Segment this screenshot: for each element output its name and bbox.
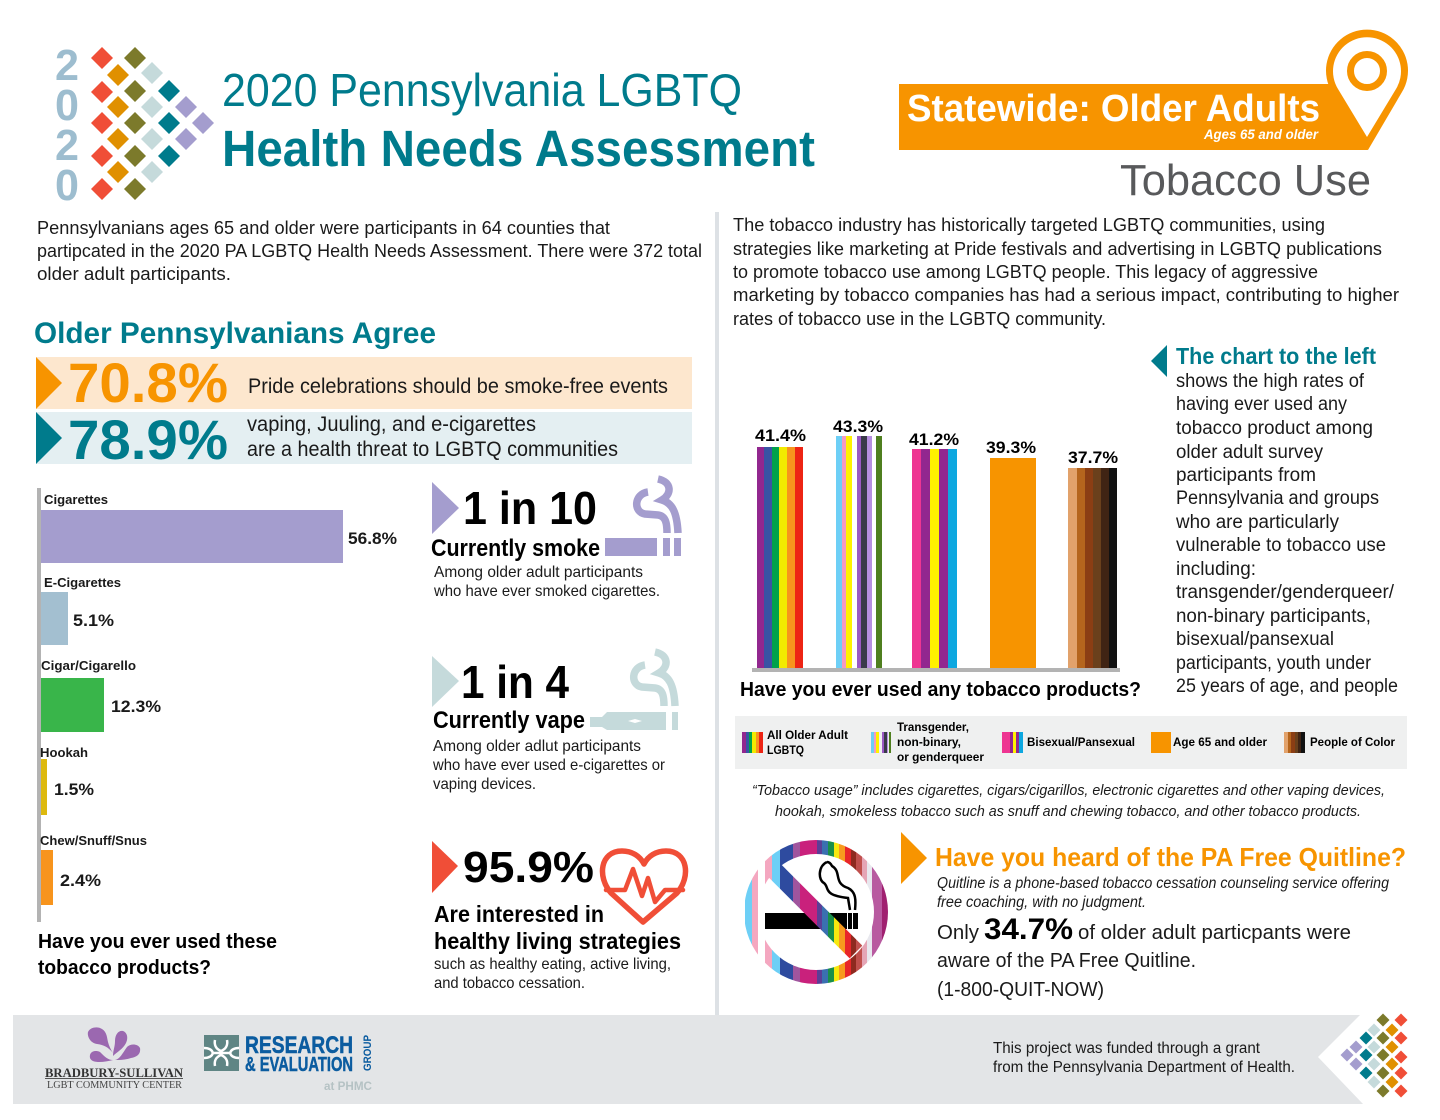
stat: 1 in 4 currently vape: who have ever used e-cigarettes or — [432, 757, 666, 774]
bar: cigarettes: Cigarettes — [44, 492, 108, 507]
logo: Research and Evaluation Group: at PHMC — [324, 1079, 372, 1093]
heading: older pennsylvanians agree: Older Pennsylvanians Agree — [34, 317, 436, 350]
bar: cigar — [41, 658, 161, 732]
diamond pattern mirrored — [1340, 1014, 1408, 1098]
stat: 1 in 4 currently vape — [432, 652, 678, 793]
stat: 95.9% healthy living: and tobacco cessation. — [434, 975, 585, 992]
vertical year 2020 — [55, 41, 79, 210]
funding statement: from the Pennsylvania Department of Health. — [993, 1059, 1295, 1076]
vertical year 2020: 0 — [55, 81, 79, 130]
callout: chart explanation: shows the high rates of — [1176, 371, 1365, 392]
stat: 1 in 4 currently vape: Among older adlut participants — [433, 738, 641, 755]
funding statement: This project was funded through a grant — [993, 1040, 1261, 1057]
stat band: 78.9%: 78.9% — [68, 408, 228, 471]
legend item: all older adult: LGBTQ — [767, 743, 804, 757]
bar chart caption — [38, 931, 277, 979]
vertical year 2020: 0 — [55, 161, 79, 210]
stat: 1 in 10 currently smoke: who have ever smoked cigarettes. — [433, 583, 660, 600]
legend item: all older adult — [742, 728, 848, 757]
callout: chart explanation: 25 years of age, and people — [1176, 676, 1398, 697]
chart caption: Have you ever used any tobacco products? — [740, 679, 1141, 701]
vertical year 2020: 2 — [55, 121, 79, 170]
intro text: tobacco industry: The tobacco industry has historically targeted LGBTQ communities, using — [733, 215, 1325, 235]
bar: hookah: 1.5% — [54, 780, 94, 799]
stat: 1 in 10 currently smoke: Currently smoke — [431, 535, 600, 562]
bar: all older adult LGBTQ 41.4%: 41.4% — [755, 426, 806, 445]
bar: cigar: Cigar/Cigarello — [41, 658, 136, 673]
bar: bisexual/pansexual 41.2% — [909, 430, 959, 668]
stat: 95.9% healthy living: healthy living strategies — [434, 928, 681, 954]
intro text: tobacco industry: strategies like marketing at Pride festivals and advertising in LGBTQ publications — [733, 239, 1382, 259]
title — [222, 64, 815, 177]
callout: chart explanation: Pennsylvania and groups — [1176, 488, 1379, 509]
intro text: participants — [37, 218, 702, 284]
bar: age 65 and older 39.3% — [986, 438, 1036, 668]
title: 2020 Pennsylvania LGBTQ — [222, 64, 742, 116]
logo: Research and Evaluation Group: GROUP — [362, 1035, 374, 1071]
callout: PA Free Quitline: free coaching, with no judgment. — [937, 894, 1146, 911]
intro text: tobacco industry: marketing by tobacco companies has had a serious impact, contributing to higher — [733, 285, 1399, 305]
stat band: 70.8% — [36, 351, 692, 414]
callout: chart explanation: bisexual/pansexual — [1176, 629, 1334, 650]
stat: 95.9% healthy living: Are interested in — [434, 901, 604, 927]
icon: cigarette — [605, 479, 681, 556]
bar: transgender 43.3%: 43.3% — [833, 417, 883, 436]
stat: 1 in 4 currently vape: 1 in 4 — [461, 656, 569, 708]
intro text: participants: partipcated in the 2020 PA LGBTQ Health Needs Assessment. There were 372 total — [37, 241, 702, 261]
stat: 1 in 4 currently vape: Currently vape — [433, 707, 585, 734]
callout: chart explanation: The chart to the left — [1176, 343, 1376, 369]
stat: 1 in 10 currently smoke: Among older adult participants — [434, 564, 643, 581]
funding statement — [993, 1040, 1295, 1076]
legend item: people of color — [1284, 732, 1395, 753]
footnote: tobacco usage definition — [752, 782, 1385, 820]
icon: heart with pulse — [602, 851, 686, 922]
bar: people of color 37.7% — [1068, 448, 1118, 668]
callout: PA Free Quitline: Only — [937, 922, 979, 944]
callout: PA Free Quitline: aware of the PA Free Quitline. — [937, 950, 1196, 972]
callout: chart explanation — [1151, 343, 1398, 697]
callout: PA Free Quitline: (1-800-QUIT-NOW) — [937, 979, 1104, 1001]
intro text: tobacco industry: rates of tobacco use in the LGBTQ community. — [733, 309, 1106, 329]
bar chart: any tobacco use by group — [740, 417, 1141, 701]
intro text: tobacco industry — [733, 215, 1399, 329]
stat: 95.9% healthy living: 95.9% — [463, 843, 594, 892]
banner: statewide older adults with map pin — [899, 30, 1408, 150]
bar: e-cigarettes: 5.1% — [73, 611, 114, 630]
stat: 95.9% healthy living — [432, 841, 686, 992]
legend item: transgender: non-binary, — [897, 735, 961, 749]
logo: Bradbury-Sullivan LGBT Community Center: LGBT COMMUNITY CENTER — [47, 1080, 182, 1091]
logo: Research and Evaluation Group: & EVALUATION — [245, 1054, 353, 1076]
vertical year 2020: 2 — [55, 41, 79, 90]
callout: chart explanation: non-binary participants, — [1176, 606, 1371, 627]
intro text: participants: Pennsylvanians ages 65 and older were participants in 64 counties that — [37, 218, 610, 238]
callout: chart explanation: tobacco product among — [1176, 418, 1373, 439]
bar: hookah: Hookah — [40, 745, 88, 760]
bar: cigar: 12.3% — [111, 697, 161, 716]
intro text: participants: older adult participants. — [37, 264, 231, 284]
legend item: bisexual — [1002, 732, 1135, 753]
stat band: 70.8%: 70.8% — [68, 351, 228, 414]
banner heading: Statewide: Older Adults — [907, 88, 1320, 130]
bar: age 65 and older 39.3%: 39.3% — [986, 438, 1036, 457]
stat band: 78.9% — [36, 408, 692, 471]
bar: chew — [40, 833, 147, 905]
legend — [735, 716, 1407, 769]
legend item: transgender: or genderqueer — [897, 750, 984, 764]
title: Health Needs Assessment — [222, 120, 815, 177]
stat: 1 in 10 currently smoke: 1 in 10 — [463, 482, 597, 534]
footnote: tobacco usage definition: “Tobacco usage” includes cigarettes, cigars/cigarillos, electronic cigarettes and other vaping devices, — [752, 782, 1385, 799]
callout: PA Free Quitline: of older adult particpants were — [1078, 922, 1351, 944]
bar: cigarettes: 56.8% — [348, 529, 397, 548]
legend item: age 65: Age 65 and older — [1173, 735, 1267, 749]
footer — [13, 1014, 1408, 1104]
callout: chart explanation: transgender/genderqueer/ — [1176, 582, 1395, 603]
stat band: 78.9%: are a health threat to LGBTQ communities — [247, 438, 618, 461]
stat: 1 in 4 currently vape: vaping devices. — [433, 776, 536, 793]
logo: Bradbury-Sullivan LGBT Community Center — [45, 1027, 184, 1091]
column divider — [715, 212, 719, 1015]
bar: hookah — [40, 745, 94, 815]
legend item: all older adult: All Older Adult — [767, 728, 848, 742]
legend item: transgender: Transgender, — [897, 720, 969, 734]
logo: 2020 with diamond arrow — [55, 41, 214, 210]
callout: chart explanation: participants, youth under — [1176, 653, 1372, 674]
stat: 1 in 10 currently smoke — [431, 479, 681, 600]
arrow pointing left — [1151, 345, 1167, 377]
rainbow ring and slash — [745, 835, 888, 990]
callout: chart explanation: participants from — [1176, 465, 1316, 486]
logo: Research and Evaluation Group: RESEARCH — [245, 1032, 353, 1059]
callout: chart explanation: older adult survey — [1176, 442, 1323, 463]
diamond pattern — [91, 47, 214, 200]
icon: vape pen — [590, 652, 678, 730]
logo: Research and Evaluation Group — [204, 1032, 374, 1093]
bar: e-cigarettes — [41, 575, 121, 645]
callout: PA Free Quitline: Have you heard of the PA Free Quitline? — [935, 842, 1406, 872]
callout: chart explanation: having ever used any — [1176, 394, 1347, 415]
bar chart: products ever used — [37, 488, 397, 979]
bar chart caption: tobacco products? — [38, 957, 211, 979]
bar: all older adult LGBTQ 41.4% — [755, 426, 806, 668]
cigarette and smoke — [765, 862, 858, 929]
bar chart caption: Have you ever used these — [38, 931, 277, 953]
callout: chart explanation: vulnerable to tobacco use — [1176, 535, 1386, 556]
legend item: people of color: People of Color — [1310, 735, 1395, 749]
logo: Bradbury-Sullivan LGBT Community Center: BRADBURY-SULLIVAN — [45, 1065, 184, 1080]
intro text: tobacco industry: to promote tobacco use among LGBTQ people. This legacy of aggressive — [733, 262, 1318, 282]
legend item: transgender — [871, 720, 984, 764]
arrow — [901, 832, 927, 884]
callout: PA Free Quitline: 34.7% — [984, 913, 1073, 946]
icon: map pin — [1326, 30, 1408, 150]
bar: chew: Chew/Snuff/Snus — [40, 833, 147, 848]
legend item: age 65 — [1151, 732, 1267, 753]
callout: PA Free Quitline: Quitline is a phone-based tobacco cessation counseling service offering — [937, 875, 1389, 892]
bar: cigarettes — [41, 492, 397, 563]
stat band: 70.8%: Pride celebrations should be smoke-free events — [248, 375, 668, 398]
callout: chart explanation: who are particularly — [1175, 512, 1339, 533]
bar: chew: 2.4% — [60, 871, 101, 890]
stat: 95.9% healthy living: such as healthy eating, active living, — [434, 956, 671, 973]
banner subheading: Ages 65 and older — [1203, 126, 1319, 142]
bar: e-cigarettes: E-Cigarettes — [44, 575, 121, 590]
bar: transgender 43.3% — [833, 417, 883, 668]
legend item: bisexual: Bisexual/Pansexual — [1027, 735, 1135, 749]
stat band: 78.9%: vaping, Juuling, and e-cigarettes — [247, 413, 536, 436]
icon: rainbow no smoking sign — [745, 835, 888, 990]
bar: bisexual/pansexual 41.2%: 41.2% — [909, 430, 959, 449]
topic heading: Tobacco Use — [1120, 156, 1371, 205]
callout: chart explanation: including: — [1176, 559, 1256, 580]
footnote: tobacco usage definition: hookah, smokeless tobacco such as snuff and chewing tobacco, and other tobacco products. — [775, 803, 1361, 820]
callout: PA Free Quitline — [901, 832, 1406, 1001]
bar: people of color 37.7%: 37.7% — [1068, 448, 1118, 467]
